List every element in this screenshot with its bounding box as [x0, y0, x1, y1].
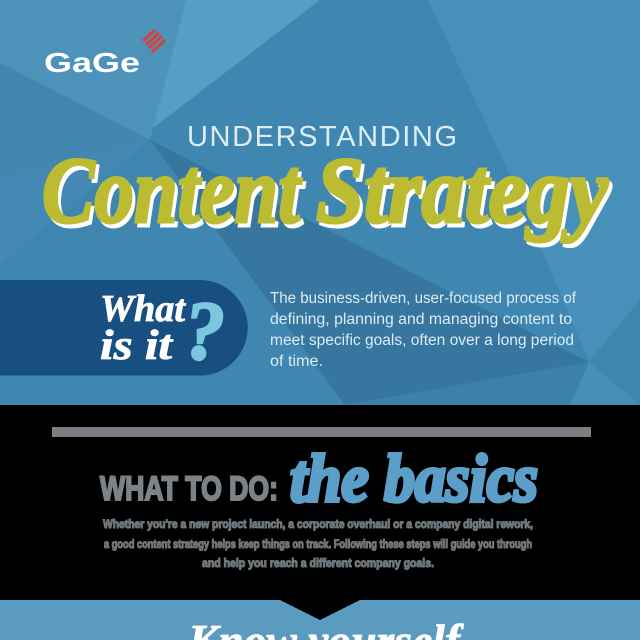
heading: what to do: WHAT TO DO:: [100, 470, 278, 508]
panel: know yourself section: [0, 600, 640, 640]
text: intro paragraph: Whether you're a new project launch, a corporate overhaul or a company digital rework,: [103, 519, 533, 531]
text: intro paragraph: [103, 519, 533, 570]
heading: the basics: the basics: [290, 440, 538, 516]
panel: what is it pill: [0, 280, 248, 378]
logo icon: red stripes: [143, 30, 165, 52]
title shadow: Content: [45, 143, 305, 247]
text: definition: defining, planning and managing content to: [270, 311, 572, 328]
what is it label: What: [100, 288, 186, 330]
text: definition: meet specific goals, often over a long period: [270, 332, 574, 349]
panel: black section: [0, 405, 640, 600]
title face: Strategy: [316, 139, 608, 243]
logo wordmark: GaGe: [44, 47, 140, 78]
title face: [42, 139, 608, 243]
heading: content strategy: [42, 139, 611, 247]
what is it label: [100, 288, 186, 369]
text: intro paragraph: and help you reach a different company goals.: [202, 558, 434, 570]
what is it label: is it: [100, 323, 174, 369]
question mark: ?: [185, 285, 225, 378]
text: definition: of time.: [270, 353, 323, 370]
title face: Content: [42, 139, 302, 243]
panel: faceted blue header background: [0, 0, 640, 405]
text: definition: [270, 290, 577, 370]
text: definition: The business-driven, user-focused process of: [270, 290, 577, 307]
gray divider bar: [52, 427, 591, 437]
title shadow: [45, 143, 611, 247]
heading: understanding: UNDERSTANDING: [187, 121, 457, 153]
logo: GAGE: [44, 30, 165, 78]
text: intro paragraph: a good content strategy helps keep things on track. Following these steps will guide you through: [104, 539, 532, 551]
arrow: black notch pointer: [280, 600, 360, 620]
title shadow: Strategy: [319, 143, 611, 247]
